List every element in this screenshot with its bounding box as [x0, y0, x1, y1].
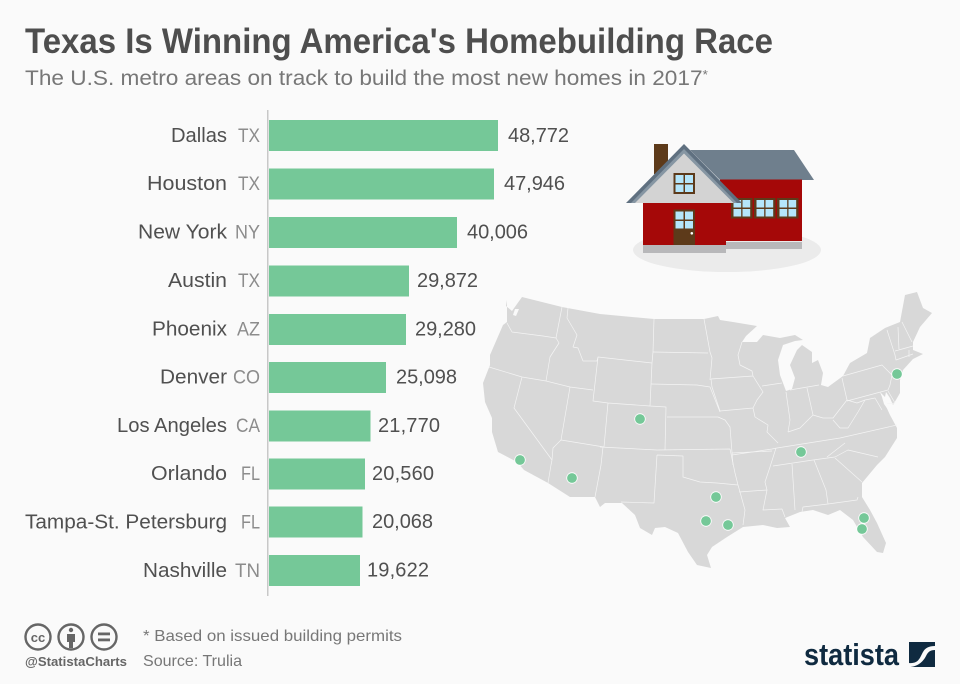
row: Austin: TX: [238, 271, 260, 292]
axis line: [267, 110, 268, 596]
US map: [483, 292, 932, 568]
row: Phoenix: Phoenix: [152, 318, 227, 340]
row: New York: NY: [235, 222, 260, 244]
marker: Houston: [723, 520, 733, 530]
row: Los Angeles: [117, 410, 440, 442]
row: Houston: 47,946: [504, 173, 565, 195]
row: New York: [138, 217, 528, 248]
foundation: [643, 242, 802, 253]
chimney: [654, 144, 668, 174]
bar chart: [25, 110, 569, 596]
door: [674, 210, 695, 245]
gable roof highlight: [631, 149, 737, 203]
marker: Nashville: [796, 447, 806, 457]
row: Tampa-St. Petersburg: 20,068: [372, 511, 433, 533]
marker: New York: [892, 369, 902, 379]
row: Orlando: 20,560: [372, 463, 434, 485]
gable roof edge: [626, 144, 742, 203]
chesapeake bay: [880, 392, 889, 411]
main roof: [690, 150, 814, 180]
icon: attribution: [58, 624, 84, 650]
state borders: [489, 307, 913, 525]
marker: Dallas: [711, 492, 721, 502]
row: Los Angeles: CA: [236, 416, 260, 437]
logo icon: [909, 642, 935, 667]
city markers: [515, 369, 902, 534]
right windows: [731, 198, 798, 218]
marker: Austin: [701, 516, 711, 526]
marker: Los Angeles: [515, 455, 525, 465]
row: Nashville: [143, 555, 429, 586]
marker: Tampa: [857, 524, 867, 534]
row: Denver: [160, 362, 457, 393]
marker: Orlando: [859, 513, 869, 523]
subtitle: The U.S. metro areas on track to build the most new homes in 2017: [25, 67, 654, 90]
handle: @StatistaCharts: [25, 655, 127, 669]
marker: Denver: [635, 414, 645, 424]
title: Texas Is Winning America's Homebuilding Race: [25, 22, 773, 61]
statista logo: [804, 637, 935, 672]
row: Denver: Denver: [160, 366, 227, 388]
row: Dallas: Dallas: [171, 125, 227, 147]
land outline: [483, 292, 932, 568]
row: Phoenix: 29,280: [415, 318, 476, 340]
logo wordmark: statista: [804, 637, 900, 672]
row: Dallas: TX: [238, 126, 260, 147]
row: Orlando: Orlando: [151, 463, 227, 485]
row: Denver: 25,098: [396, 366, 457, 388]
row: Tampa-St. Petersburg: Tampa-St. Petersburg: [25, 512, 227, 534]
row: Orlando: FL: [241, 464, 260, 485]
row: Tampa-St. Petersburg: FL: [241, 512, 260, 534]
row: Phoenix: AZ: [237, 320, 260, 340]
gable wall: [635, 154, 734, 203]
row: New York: New York: [138, 222, 228, 244]
red walls: [643, 180, 802, 245]
row: Nashville: 19,622: [367, 560, 429, 582]
row: Nashville: TN: [235, 561, 260, 582]
source: Source: Trulia: [143, 653, 242, 670]
row: Dallas: 48,772: [508, 125, 569, 147]
icon: cc license: [26, 624, 116, 650]
icon: house: [626, 144, 821, 272]
house shadow: [633, 228, 821, 272]
footnote: * Based on issued building permits: [143, 628, 402, 645]
row: Tampa-St. Petersburg: [25, 506, 433, 538]
row: Nashville: Nashville: [143, 560, 227, 582]
marker: Phoenix: [567, 473, 577, 483]
row: New York: 40,006: [467, 222, 528, 244]
row: Houston: TX: [238, 174, 260, 195]
row: Denver: CO: [233, 368, 260, 388]
row: Dallas: [171, 120, 569, 151]
row: Houston: Houston: [147, 173, 227, 195]
gable window: [674, 173, 695, 194]
row: Orlando: [151, 458, 434, 490]
row: Austin: 29,872: [417, 270, 478, 292]
row: Austin: Austin: [168, 270, 227, 292]
row: Houston: [147, 168, 565, 200]
icon: no derivatives: [92, 624, 116, 650]
icon: cc: cc: [31, 630, 45, 645]
subtitle: *: [703, 67, 708, 82]
row: Phoenix: [152, 314, 476, 345]
row: Austin: [168, 266, 478, 296]
row: Los Angeles: Los Angeles: [117, 415, 227, 437]
puget sound: [513, 309, 519, 316]
row: Los Angeles: 21,770: [378, 415, 440, 437]
